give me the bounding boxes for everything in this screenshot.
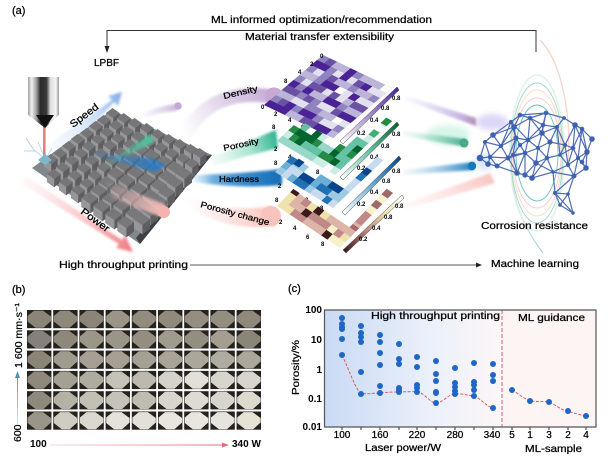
density colorbar [340,87,399,144]
arrow: feedback loop to LPBF [104,30,536,53]
porosity change axis numbers: 0.4 [372,226,381,232]
plot background: ML [502,310,596,427]
porosity change axis numbers: 0.2 [359,237,368,243]
blue blob [468,162,476,170]
hardness colorbar [342,156,401,215]
density cells [264,55,392,138]
porosity axis numbers: 0.8 [392,132,401,138]
density axis numbers: 0 [261,105,265,111]
heatmap: porosity [272,87,401,180]
icon: ripple arcs [510,40,569,253]
x-axis ticks: 4 [583,430,589,441]
y-axis ticks [303,305,322,433]
icon: neural network brain [477,111,594,214]
panel: (c) porosity chart [288,283,596,455]
hardness axis numbers: 8 [305,198,309,204]
label: machine learning: Machine learning [491,258,579,270]
green ray [403,131,467,147]
porosity axis numbers: 2 [274,147,278,153]
axis label: 1 600 mm/s: 1 600 mm·s⁻¹ [13,303,25,368]
hardness axis numbers: 0.8 [382,179,391,185]
arrow: speed [46,92,122,160]
streams between plate and heatmaps [182,83,283,227]
density axis numbers: 0.8 [381,106,390,112]
porosity axis numbers: 4 [288,155,292,161]
grid of printed cubes [44,108,207,237]
chart label: ML guidance: ML guidance [518,313,586,324]
x-axis ticks: 280 [447,430,464,441]
minimum trend dashed line [342,355,586,416]
glow: purple [476,114,508,130]
stream on plate: green [95,134,154,172]
heatmap: porosity change [275,151,404,253]
density axis numbers: 8 [316,133,320,139]
streams to machine learning [403,95,508,210]
x-axis title: laser power: Laser power/W [365,443,442,454]
porosity change axis numbers: 0.8 [384,215,393,221]
stream on plate: blue [82,152,166,172]
green blob [460,138,468,148]
divider dashed line [501,310,503,427]
chart label: high throughput printing: High throughput printing [371,311,500,322]
x-axis ticks: 100 [334,430,351,441]
arrow: power [22,176,133,252]
x-axis ticks: 220 [409,430,426,441]
porosity change axis numbers: 0.8 [395,204,404,210]
porosity axis numbers: 0.8 [381,144,390,150]
density axis numbers: 2 [310,62,314,68]
label: high throughput printing: High throughput printing [59,259,188,271]
heading: material transfer extensibility: Material transfer extensibility [245,31,395,43]
stream on plate: pink [105,180,166,218]
density axis numbers: 0.4 [370,118,379,124]
porosity change cells [277,151,393,248]
porosity change axis numbers: 2 [279,220,283,226]
hardness axis numbers [274,161,401,212]
panel: (b) sample photographs [12,284,261,450]
porosity axis numbers [272,125,401,176]
x-axis ticks: 5 [509,430,515,441]
density axis numbers: 0.2 [357,131,366,137]
data points [339,315,589,419]
porosity change colorbar [343,195,404,253]
text: power: Power [78,207,112,235]
purple ray [405,95,476,126]
laser beam [43,126,46,157]
porosity axis numbers: 0.2 [357,166,366,172]
hardness axis numbers: 8 [274,161,278,167]
axis label: 340 W: 340 W [232,439,261,450]
axis label: 100: 100 [30,439,47,450]
icon: laser nozzle [24,77,59,165]
density blob [265,88,283,104]
lightning sparks [24,138,52,158]
porosity axis numbers: 8 [272,125,276,131]
x-axis ticks: 3 [546,430,552,441]
hardness axis numbers: 0.2 [357,202,366,208]
y-axis ticks: 1 [316,365,322,376]
label: hardness: Hardness [219,174,259,184]
heatmap: hardness [274,124,401,215]
density axis numbers: 4 [288,118,292,124]
label: corrosion resistance: Corrosion resistance [481,221,588,232]
porosity axis numbers: 0.4 [370,155,379,161]
axis label: 600: 600 [12,424,24,442]
panel label: (b): (b) [12,284,25,296]
x-axis ticks: 340 [484,430,501,441]
porosity change axis numbers: 8 [275,198,279,204]
x-axis title: ML sample: ML-sample [525,444,582,455]
outer orange arc [540,40,569,165]
y-axis ticks: 10 [311,335,322,346]
plot background: printing [324,310,502,427]
plot frame and ticks [324,310,596,430]
network edges [480,113,592,213]
hardness axis numbers: 0.8 [392,169,401,175]
density axis numbers [261,54,401,139]
label: density: Density [222,83,259,101]
nozzle cone [36,115,54,128]
glow: green [426,125,470,145]
blob: purple [174,102,182,110]
porosity change axis numbers: 4 [293,226,297,232]
y-axis ticks: 100 [305,305,322,316]
density axis numbers: 2 [274,112,278,118]
label: porosity: Porosity [222,136,260,153]
hardness stream [192,169,282,186]
porosity stream [210,130,278,166]
plate base [32,110,212,244]
melt spot [38,154,52,165]
x-axis ticks [334,430,589,441]
porosity axis numbers: 6 [301,162,305,168]
hardness axis numbers: 8 [320,206,324,212]
label: LPBF: LPBF [94,58,119,69]
panel: printed sample plate [22,92,212,252]
stream blob: pink [158,206,170,218]
density axis numbers: 0 [320,54,324,60]
y-axis ticks: 0.01 [303,422,322,433]
y-axis ticks: 0.1 [308,394,322,405]
heatmap: density [261,54,401,144]
porosity change axis numbers: 6 [306,235,310,241]
plate dark edge [136,155,212,244]
density axis numbers: 0.8 [392,96,401,102]
density axis numbers: 4 [298,70,302,76]
heading: ML informed optimization: ML informed optimization/recommendation [211,14,432,26]
x-axis ticks: 1 [527,430,533,441]
photo grid [27,310,261,430]
stream to top: purple [138,104,177,120]
porosity cells [277,87,392,175]
outer teal arc [512,140,543,253]
hardness axis numbers: 4 [291,191,295,197]
arrow: speed axis [15,371,20,425]
pink ray [403,173,495,210]
panel label: (c): (c) [288,283,301,295]
density axis numbers: 6 [301,125,305,131]
density stream [182,95,276,142]
arrow: power axis [50,442,229,448]
x-axis ticks: 160 [372,430,389,441]
hardness cells [275,124,383,208]
hardness axis numbers: 2 [278,184,282,190]
blue ray [403,162,474,175]
porosity change stream [184,194,276,227]
porosity axis numbers: 8 [316,170,320,176]
panel label: (a): (a) [12,5,25,17]
y-axis title: Porosity/% [291,340,302,395]
hardness axis numbers: 0.4 [370,190,379,196]
label: porosity change: Porosity change [199,199,271,227]
porosity change blob [261,206,281,226]
porosity change axis numbers: 8 [321,242,325,248]
porosity change axis numbers [275,198,404,248]
glow: blue [475,153,493,171]
nozzle barrel [28,77,59,128]
x-axis ticks: 2 [565,430,571,441]
arrow: printing to machine learning [190,262,482,268]
text: speed: Speed [68,102,101,130]
porosity colorbar [340,122,399,180]
density axis numbers: 8 [284,79,288,85]
network nodes [477,111,594,214]
